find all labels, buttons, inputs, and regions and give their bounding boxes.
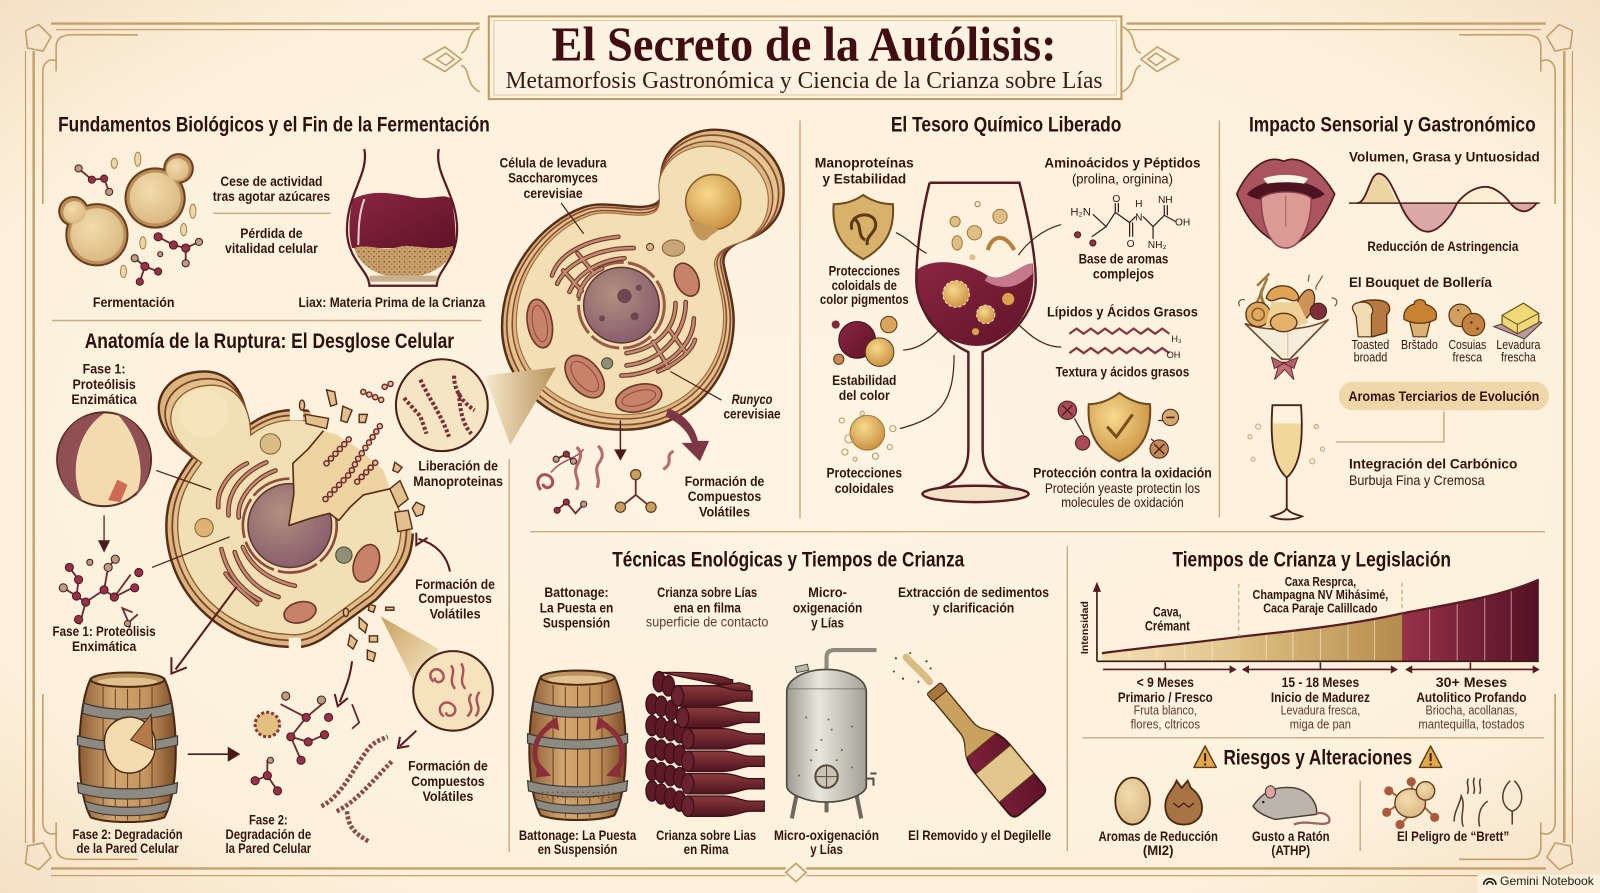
label: cava crémant: Cava, <box>1153 604 1182 620</box>
label: protección oxidación: Protección contra la oxidación <box>1033 466 1212 482</box>
label: gusto a ratón <box>1252 829 1330 859</box>
label: battonage bottom: en Suspensión <box>538 842 617 858</box>
heading: impacto sensorial: Impacto Sensorial y Gastronómico <box>1249 113 1536 137</box>
label: lías materia prima: Liax: Materia Prima de la Crianza <box>298 295 486 311</box>
label: battonage bottom <box>519 828 637 858</box>
arrow: curved to cell wall <box>416 533 450 572</box>
label: estabilidad del color: del color <box>839 388 890 404</box>
label: toasted <box>1352 337 1389 364</box>
label: levadura fresca: frescha <box>1501 349 1536 364</box>
label: cava crémant <box>1145 604 1190 635</box>
label: aromas reducción <box>1098 829 1218 859</box>
label: manoproteínas <box>815 155 914 188</box>
y axis label: Intensidad <box>1080 601 1091 654</box>
label: protección oxidación: Proteción yeaste protectin los <box>1045 481 1200 497</box>
label: célula de levadura <box>499 155 608 202</box>
icon: champagne flute <box>1248 405 1324 519</box>
icon: eggs <box>1115 778 1202 825</box>
label: formación compuestos low: Volátiles <box>422 789 474 805</box>
opened region of the wall <box>306 403 434 534</box>
label: liberación de manoproteinas: Liberación de <box>418 458 498 474</box>
label: champagne: Champagna NV Mihásimé, <box>1253 587 1388 602</box>
label: extracción: y clarificación <box>933 600 1014 616</box>
icon: amino acid formula: H₂N <box>1070 206 1091 218</box>
icon: amino acid formula: O <box>1112 194 1120 205</box>
label: micro bottom: y Lías <box>810 842 843 858</box>
icon: amino acid formula: OH <box>1175 218 1190 229</box>
arrow: small down <box>615 420 626 459</box>
label: cosuias fresca: fresca <box>1453 349 1483 364</box>
magnifier: proteolysis <box>57 412 151 506</box>
label: estabilidad del color: Estabilidad <box>832 373 896 389</box>
icon: rat <box>1253 786 1329 825</box>
label: runyco cerevisiae <box>723 392 781 422</box>
label: fase 1 bottom <box>53 624 156 655</box>
label: manoproteínas: Manoproteínas <box>815 155 914 171</box>
text: cese de actividad: Pérdida de <box>240 226 303 242</box>
icon: steel tank <box>787 650 877 818</box>
illustration: ruptured cell <box>159 372 434 661</box>
subtitle: Metamorfosis Gastronómica y Ciencia de la Crianza sobre Lías <box>506 67 1103 94</box>
label: cosuias fresca: Cosuias <box>1448 337 1486 352</box>
magnifier: manoproteins <box>396 359 488 451</box>
icon: amino acid formula: NH <box>1158 195 1173 206</box>
text: protecciones coloidals: color pigmentos <box>820 292 909 308</box>
column: 15-18 meses: Inicio de Madurez <box>1271 690 1370 706</box>
label: protección oxidación: molecules de oxidación <box>1061 495 1184 511</box>
label: crianza sobre lías top: ena en filma <box>673 600 742 616</box>
column: 30+ meses: Briocha, acollanas, <box>1426 702 1517 717</box>
label: formación de compuestos top: Compuestos <box>688 489 761 505</box>
column: 15-18 meses <box>1271 675 1370 732</box>
label: fase 1 bottom: Enximática <box>72 639 137 655</box>
icon: amino acid formula <box>1070 194 1190 251</box>
label: fase 1 top: Enzimática <box>71 392 138 408</box>
column: 15-18 meses: Levadura fresca, <box>1281 702 1360 717</box>
column: 9 meses: < 9 Meses <box>1137 675 1194 691</box>
label: toasted: Toasted <box>1352 337 1389 352</box>
label: formación de compuestos top: Volátiles <box>699 504 750 520</box>
label: micro-oxigenación top: y Lías <box>811 616 844 632</box>
label: reducción astringencia: Reducción de Astringencia <box>1367 239 1519 255</box>
text: protecciones coloidals <box>820 264 909 308</box>
icon: degraded molecules and chains <box>251 692 393 842</box>
icon: shield <box>833 195 893 259</box>
icon: champagne bottle disgorging <box>893 652 1048 819</box>
arrow: proteolysis down <box>99 515 109 551</box>
line: magnifier to cell <box>152 470 230 567</box>
icon: amino acid formula: NH₂ <box>1148 240 1167 251</box>
icon: mouth with tongue <box>1237 159 1335 248</box>
label: protecciones coloidales: Protecciones <box>827 466 902 482</box>
label: fase 2 molecules <box>226 813 312 857</box>
label: célula de levadura: cerevisiae <box>523 186 583 202</box>
label: protecciones coloidales <box>827 466 902 497</box>
label: crianza sobre lías top: Crianza sobre Lías <box>657 585 757 601</box>
icon: pastry bouquet <box>1239 274 1337 380</box>
label: extracción <box>898 585 1049 616</box>
label: lípidos: Lípidos y Ácidos Grasos <box>1047 303 1198 320</box>
label: champagne: Caca Paraje Calillcado <box>1263 600 1378 615</box>
text: cese de actividad: tras agotar azúcares <box>213 189 330 205</box>
label: toasted: broadd <box>1354 349 1387 364</box>
label: estabilidad del color <box>832 373 896 404</box>
column: 15-18 meses: miga de pan <box>1290 717 1351 732</box>
label: formación compuestos mid: Volátiles <box>430 606 481 622</box>
icon: colloidal particle <box>839 411 896 461</box>
label: crianza bottom: Crianza sobre Lias <box>656 828 756 844</box>
icon: color spheres <box>832 316 897 366</box>
label: cosuias fresca <box>1448 337 1486 364</box>
arrow: barrel to fragments <box>188 748 239 760</box>
label: base de aromas: Base de aromas <box>1079 251 1168 267</box>
icon: fatty acids: OH <box>1167 350 1180 360</box>
icon: brett yeast and smell <box>1382 777 1522 829</box>
label: fase 1 bottom: Fase 1: Proteólisis <box>53 624 156 640</box>
label: fase 2 barrel <box>72 827 183 857</box>
icon: stacked bottles <box>646 672 764 816</box>
icon: cookies <box>1449 304 1485 336</box>
icon: butter <box>1494 303 1542 339</box>
label: micro-oxigenación top: oxigenación <box>793 600 862 616</box>
text: cese de actividad: Cese de actividad <box>220 174 322 190</box>
connector lines to glass <box>896 225 1061 429</box>
watermark <box>1478 875 1600 893</box>
label: formación compuestos low: Compuestos <box>411 774 485 790</box>
label: aminoácidos <box>1044 155 1201 188</box>
label: gusto a ratón: Gusto a Ratón <box>1252 829 1330 845</box>
label: fase 2 barrel: Fase 2: Degradación <box>72 827 183 843</box>
label: champagne <box>1253 574 1388 615</box>
arrow: large cell to compounds <box>665 408 709 461</box>
label: fase 1 top: Fase 1: <box>83 362 126 378</box>
label: battonage top: Suspensión <box>543 616 610 632</box>
icon: toast <box>1352 300 1390 337</box>
label: fase 2 barrel: de la Pared Celular <box>77 841 179 857</box>
chart: wave <box>1349 174 1540 232</box>
heading: tesoro químico: El Tesoro Químico Liberado <box>891 113 1121 137</box>
column: 15-18 meses: 15 - 18 Meses <box>1282 675 1359 691</box>
label: formación compuestos mid <box>415 577 495 622</box>
label: protecciones coloidales: coloidales <box>835 481 894 497</box>
label: gusto a ratón: (ATHP) <box>1271 843 1310 859</box>
label: fase 1 top: Proteólisis <box>72 377 136 393</box>
heading: fundamentos: Fundamentos Biológicos y el Fin de la Fermentación <box>58 113 490 137</box>
label: battonage top: Battonage: <box>544 585 609 601</box>
label: micro-oxigenación top: Micro- <box>808 585 847 601</box>
label: micro bottom: Micro-oxigenación <box>774 828 879 844</box>
icon: amino acid formula: N <box>1135 212 1142 223</box>
cone: zoom to large cell <box>485 367 556 445</box>
column: 30+ meses <box>1416 675 1527 732</box>
label: aromas reducción: Aromas de Reducción <box>1098 829 1218 845</box>
label: textura: Textura y ácidos grasos <box>1056 365 1189 381</box>
label: battonage top <box>540 585 613 632</box>
label: aminoácidos: (prolina, orginina) <box>1072 172 1173 188</box>
arrow: debris down <box>335 661 352 706</box>
watermark: Gemini Notebook <box>1500 875 1594 888</box>
label: fase 1 top <box>71 362 138 408</box>
icon: volatile compounds top <box>538 446 673 513</box>
icon: fatty acids: H₃ <box>1171 334 1182 344</box>
column: 30+ meses: mantequilla, tostados <box>1418 717 1524 732</box>
magnifier: swirls <box>413 651 493 731</box>
label: levadura fresca: Levadura <box>1496 337 1541 352</box>
text: protecciones coloidals: Protecciones <box>829 264 900 280</box>
label: fermentación: Fermentación <box>93 295 174 311</box>
pill: aromas terciarios: Aromas Terciarios de Evolución <box>1348 389 1539 405</box>
heading: técnicas: Técnicas Enológicas y Tiempos de Crianza <box>612 547 965 571</box>
title box <box>489 16 1121 99</box>
cone: swirl zoom <box>381 616 439 682</box>
label: runyco cerevisiae: cerevisiae <box>723 406 781 422</box>
label: formación compuestos low <box>408 758 488 805</box>
illustration: large yeast cell <box>502 130 784 430</box>
label: fase 2 molecules: Degradación de <box>226 827 311 843</box>
label: battonage bottom: Battonage: La Puesta <box>519 828 637 844</box>
text: cese de actividad <box>213 174 330 257</box>
text: cese de actividad: vitalidad celular <box>225 241 318 257</box>
barrel with cut view <box>78 673 178 822</box>
label: formación compuestos low: Formación de <box>408 758 488 774</box>
label: integración carbónico <box>1349 456 1518 489</box>
label: volumen: Volumen, Grasa y Untuosidad <box>1349 149 1540 165</box>
label: fase 2 molecules: la Pared Celular <box>226 841 312 857</box>
label: base de aromas <box>1079 251 1168 283</box>
label: crianza sobre lías top <box>646 585 768 631</box>
label: liberación de manoproteinas: Manoproteinas <box>413 474 503 490</box>
icon: muffin <box>1404 300 1437 337</box>
heading: tiempos de crianza: Tiempos de Crianza y Legislación <box>1172 547 1451 571</box>
label: integración carbónico: Integración del Carbónico <box>1349 456 1518 472</box>
icon: fatty acids <box>1069 329 1182 360</box>
label: aminoácidos: Aminoácidos y Péptidos <box>1044 155 1201 171</box>
illustration: wine glass <box>916 183 1036 502</box>
label: brstado: Brštado <box>1401 337 1438 352</box>
label: extracción: Extracción de sedimentos <box>898 585 1049 601</box>
label: formación compuestos mid: Compuestos <box>418 591 492 607</box>
label: aromas reducción: (MI2) <box>1143 843 1174 859</box>
column: 9 meses <box>1118 675 1213 732</box>
label: bouquet: El Bouquet de Bollería <box>1349 275 1493 291</box>
column: 9 meses: Primario / Fresco <box>1118 690 1213 706</box>
section dividers <box>52 120 1545 852</box>
label: crianza sobre lías top: superficie de contacto <box>646 615 768 631</box>
icon: oxidation shield <box>1058 393 1179 461</box>
label: battonage top: La Puesta en <box>540 600 613 616</box>
label: cava crémant: Crémant <box>1145 619 1190 635</box>
column: 9 meses: Fruta blanco, <box>1134 702 1197 717</box>
icon: fermenting yeast cells <box>58 152 203 285</box>
label: formación de compuestos top <box>685 474 764 520</box>
label: célula de levadura: Célula de levadura <box>499 155 608 171</box>
label: levadura fresca <box>1496 337 1541 364</box>
column: 9 meses: flores, cltricos <box>1131 717 1200 732</box>
label: integración carbónico: Burbuja Fina y Cremosa <box>1349 473 1485 489</box>
arrow: swirl to chains <box>398 731 416 748</box>
label: removido: El Removido y el Degilelle <box>908 828 1051 844</box>
label: formación compuestos mid: Formación de <box>415 577 495 593</box>
connector: pill to flute <box>1336 411 1444 442</box>
label: crianza bottom: en Rima <box>684 842 729 858</box>
label: protección oxidación <box>1033 466 1212 511</box>
text: protecciones coloidals: coloidals de <box>832 278 897 294</box>
heading: anatomía: Anatomía de la Ruptura: El Desglose Celular <box>85 329 454 353</box>
title: El Secreto de la Autólisis: <box>552 16 1057 71</box>
chart: crianza wedge <box>1080 580 1539 661</box>
label: célula de levadura: Saccharomyces <box>508 171 598 187</box>
label: formación de compuestos top: Formación de <box>685 474 764 490</box>
label: crianza bottom <box>656 828 756 858</box>
label: base de aromas: complejos <box>1093 267 1154 283</box>
label: runyco cerevisiae: Runyco <box>732 392 773 408</box>
label: micro bottom <box>774 828 879 858</box>
label: peligro brett: El Peligro de “Brett” <box>1397 829 1509 845</box>
icon: amino acid formula: O <box>1127 239 1135 250</box>
label: champagne: Caxa Resprca, <box>1285 574 1356 589</box>
icon: glass with lees <box>347 149 457 286</box>
icon: fragment molecule <box>59 555 143 627</box>
arrows: time ranges <box>1103 662 1540 674</box>
label: liberación de manoproteinas <box>413 458 503 490</box>
label: manoproteínas: y Estabilidad <box>822 172 906 188</box>
arrow: to barrel <box>171 587 237 674</box>
column: 30+ meses: 30+ Meses <box>1436 675 1507 691</box>
barrel: battonage <box>528 670 628 820</box>
icon: amino acid formula: H <box>1135 199 1142 210</box>
pill: aromas terciarios <box>1339 382 1549 410</box>
heading: riesgos: Riesgos y Alteraciones <box>1223 745 1412 769</box>
label: micro-oxigenación top <box>793 585 862 632</box>
column: 30+ meses: Autolitico Profando <box>1416 690 1527 706</box>
label: fase 2 molecules: Fase 2: <box>249 813 288 829</box>
